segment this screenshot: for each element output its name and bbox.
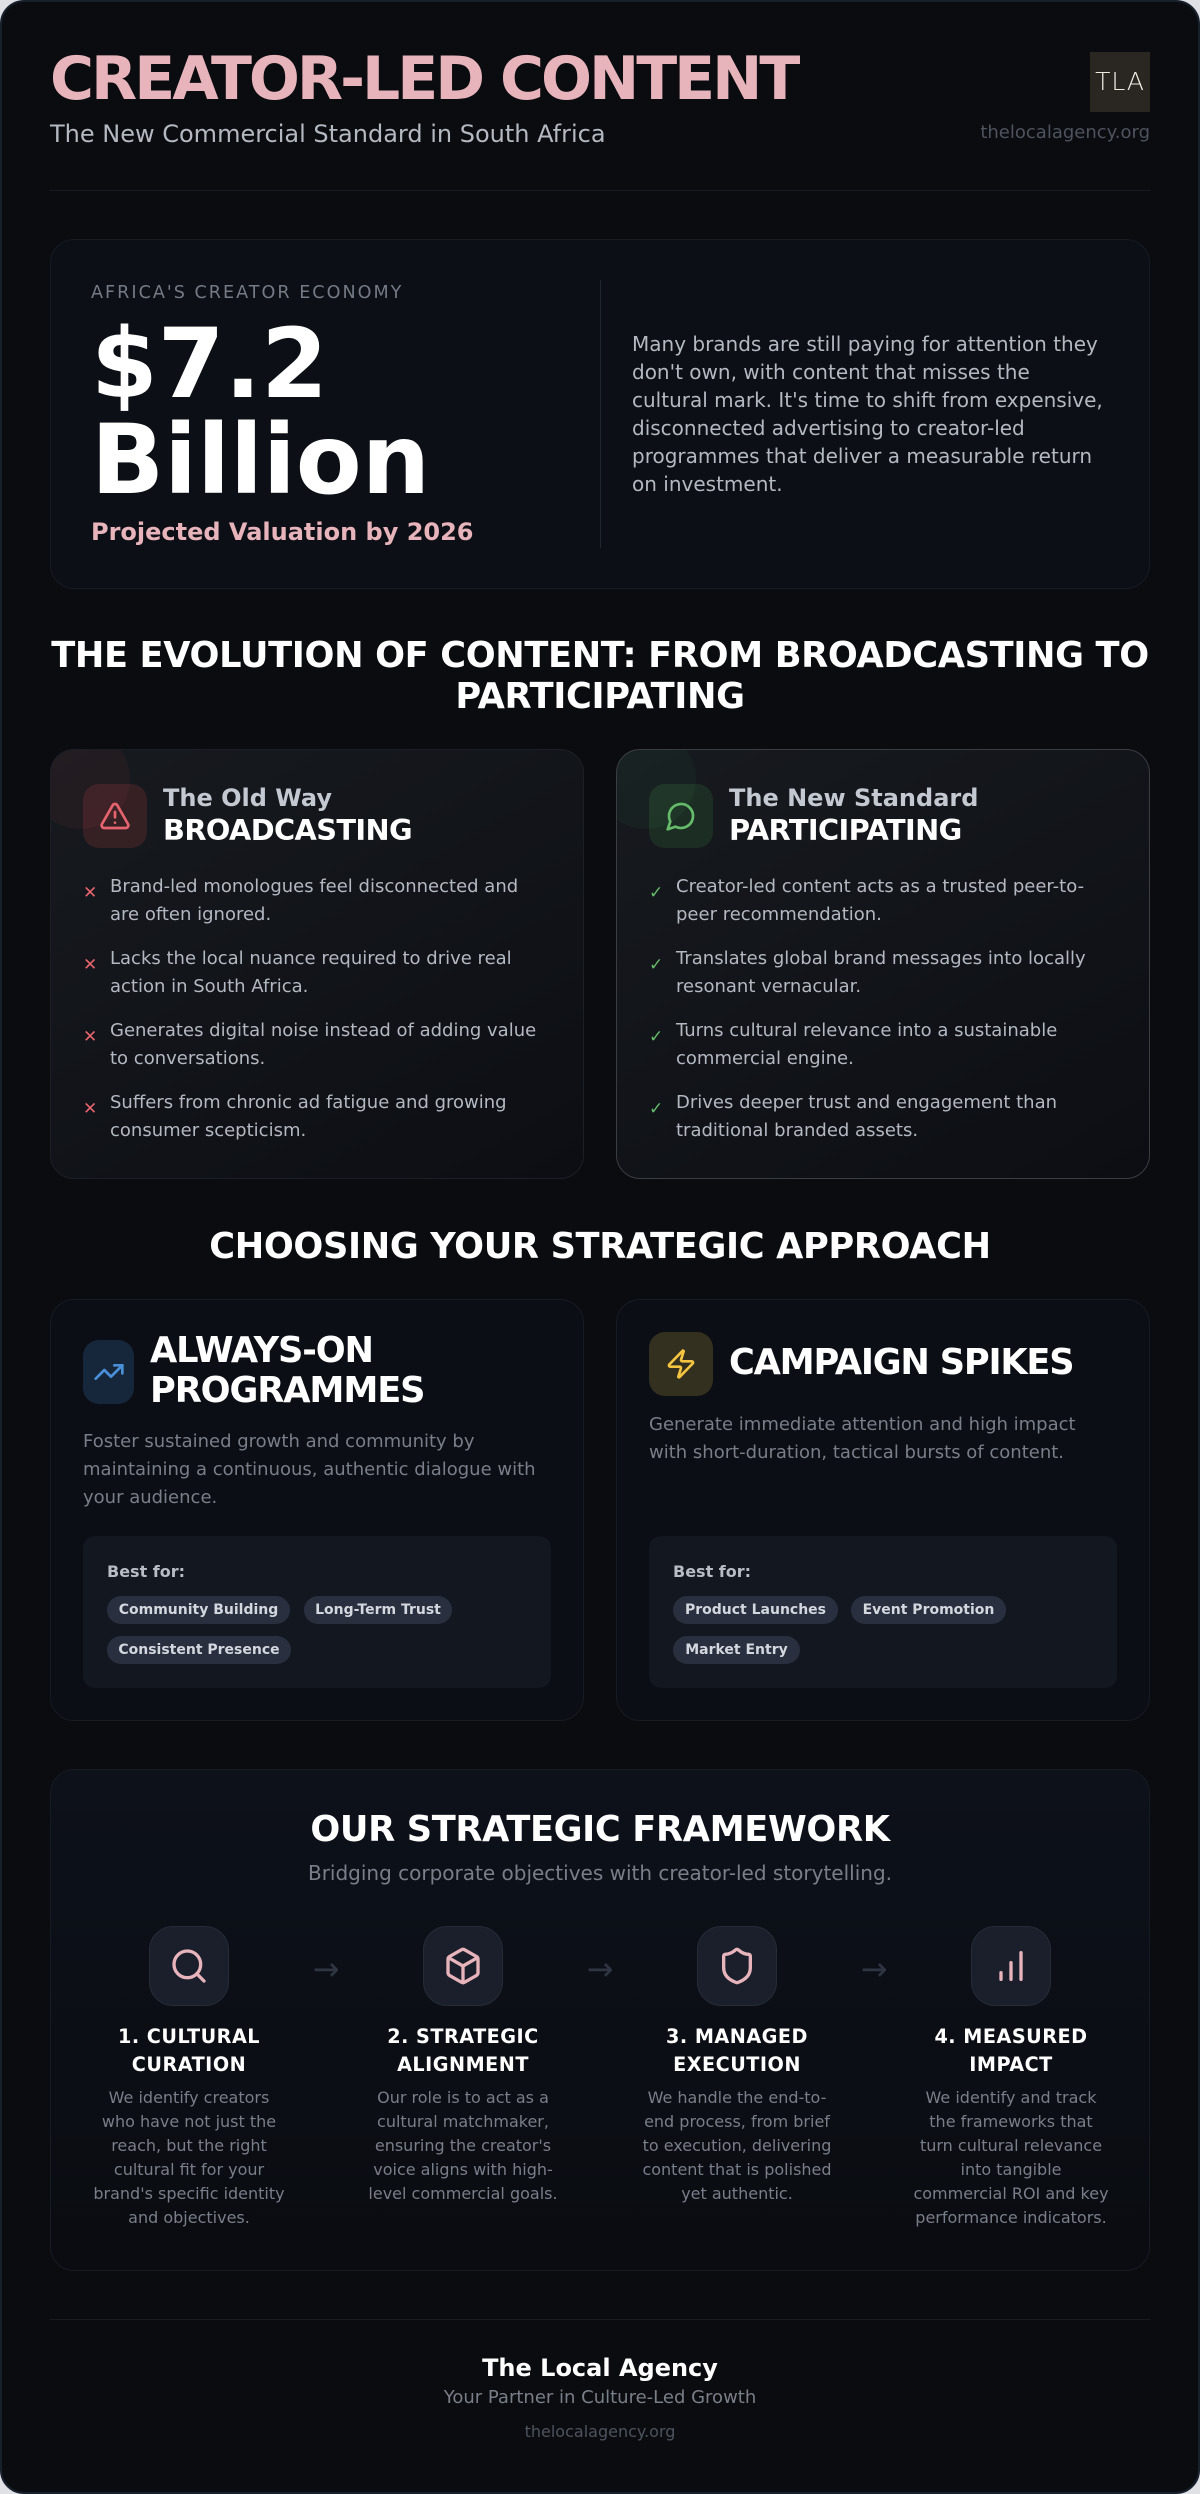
heading: evolution: PARTICIPATING [455, 676, 745, 717]
step text [913, 2088, 1109, 2227]
campaign title: CAMPAIGN SPIKES [729, 1342, 1073, 1383]
step text [642, 2088, 832, 2203]
bullet: Lacks the local nuance required to drive real [110, 948, 512, 969]
step text: ensuring the creator's [375, 2136, 551, 2155]
step text: cultural fit for your [114, 2160, 264, 2179]
framework title: OUR STRATEGIC FRAMEWORK [310, 1809, 890, 1850]
panel: new standard [616, 749, 1150, 1179]
bullet [83, 1092, 507, 1141]
bullet [83, 948, 512, 997]
icon: speech bubble [649, 784, 713, 848]
tag: Product Launches [685, 1602, 826, 1618]
step text: We identify creators [109, 2088, 269, 2107]
subtitle: The New Commercial Standard in South Africa [50, 120, 606, 148]
bullet [83, 1020, 536, 1069]
intro paragraph: on investment. [632, 472, 783, 496]
step title: 3. MANAGED [666, 2025, 808, 2048]
step text: commercial ROI and key [913, 2184, 1109, 2203]
tagline: Your Partner in Culture-Led Growth [444, 2387, 756, 2408]
step title: 1. CULTURAL [118, 2025, 260, 2048]
bullet: Creator-led content acts as a trusted peer-to- [676, 876, 1084, 897]
tag [107, 1636, 291, 1664]
big number: $7.2 [91, 308, 328, 420]
bullet [83, 876, 518, 925]
step title [387, 2025, 539, 2076]
valuation caption: Projected Valuation by 2026 [91, 518, 474, 546]
bullet: to conversations. [110, 1048, 265, 1069]
bullet: ✓ [649, 1027, 663, 1047]
step text: We handle the end-to- [648, 2088, 826, 2107]
bullet [649, 1092, 1057, 1141]
panel: campaign spikes [616, 1299, 1150, 1721]
bullet: consumer scepticism. [110, 1120, 306, 1141]
big number [91, 308, 430, 516]
agency name: The Local Agency [482, 2354, 718, 2382]
divider [600, 280, 601, 548]
eyebrow label: AFRICA'S CREATOR ECONOMY [91, 283, 403, 303]
always-on title: ALWAYS-ON [150, 1330, 373, 1371]
arrow: → [313, 1950, 339, 1988]
tag: Consistent Presence [118, 1642, 280, 1658]
always-on description [83, 1431, 536, 1508]
arrow: → [861, 1950, 887, 1988]
bullet [649, 876, 1084, 925]
bullet: are often ignored. [110, 904, 271, 925]
card kicker: The Old Way [163, 784, 332, 812]
step 2 [368, 1926, 558, 2203]
bullet: action in South Africa. [110, 976, 308, 997]
header [50, 40, 1150, 191]
footer [50, 2319, 1150, 2450]
bullet: commercial engine. [676, 1048, 854, 1069]
logo [1090, 52, 1150, 112]
step title [666, 2025, 808, 2076]
heading: evolution: THE EVOLUTION OF CONTENT: FROM BROADCASTING TO [51, 635, 1149, 676]
step text [368, 2088, 558, 2203]
bullet: Turns cultural relevance into a sustainable [676, 1020, 1057, 1041]
step title: IMPACT [969, 2053, 1053, 2076]
step text: yet authentic. [681, 2184, 793, 2203]
intro paragraph: cultural mark. It's time to shift from expensive, [632, 388, 1103, 412]
panel: old way [50, 749, 584, 1179]
bullet: ✓ [649, 955, 663, 975]
step text: Our role is to act as a [377, 2088, 549, 2107]
always-on title: PROGRAMMES [150, 1370, 424, 1411]
bullet: Translates global brand messages into locally [676, 948, 1086, 969]
decorative glow [30, 729, 130, 829]
intro paragraph: disconnected advertising to creator-led [632, 416, 1025, 440]
bullet: peer recommendation. [676, 904, 882, 925]
tag [673, 1596, 838, 1624]
tag [673, 1636, 800, 1664]
best for label: Best for: [673, 1562, 751, 1581]
bullet: ✓ [649, 1099, 663, 1119]
tag: Event Promotion [863, 1602, 994, 1618]
always-on description: Foster sustained growth and community by [83, 1431, 474, 1452]
step title [118, 2025, 260, 2076]
decorative glow [596, 729, 696, 829]
step title: EXECUTION [673, 2053, 801, 2076]
step text: content that is polished [642, 2160, 832, 2179]
campaign description: with short-duration, tactical bursts of content. [649, 1442, 1064, 1463]
icon: bar chart [971, 1926, 1051, 2006]
tag [851, 1596, 1006, 1624]
bullet: ✕ [83, 1099, 97, 1119]
campaign description [649, 1414, 1076, 1463]
card kicker: The New Standard [729, 784, 978, 812]
step 1 [93, 1926, 285, 2227]
step title [934, 2025, 1088, 2076]
icon: trending up [83, 1340, 134, 1404]
step text: the frameworks that [929, 2112, 1093, 2131]
step text: into tangible [960, 2160, 1062, 2179]
website link: thelocalagency.org [980, 122, 1150, 143]
bullet [649, 1020, 1057, 1069]
bullet: Brand-led monologues feel disconnected and [110, 876, 518, 897]
intro paragraph: programmes that deliver a measurable return [632, 444, 1092, 468]
panel: always-on [50, 1299, 584, 1721]
tag [304, 1596, 452, 1624]
bullet list [649, 876, 1086, 1141]
step text: cultural matchmaker, [377, 2112, 549, 2131]
step title: 2. STRATEGIC [387, 2025, 539, 2048]
bullet: resonant vernacular. [676, 976, 861, 997]
card title: PARTICIPATING [729, 813, 962, 847]
step text [93, 2088, 285, 2227]
step title: CURATION [132, 2053, 246, 2076]
title: CREATOR-LED CONTENT [50, 44, 797, 114]
framework subtitle: Bridging corporate objectives with creator-led storytelling. [308, 1861, 892, 1885]
arrow: → [587, 1950, 613, 1988]
step title: ALIGNMENT [397, 2053, 529, 2076]
tag: Market Entry [685, 1642, 788, 1658]
panel: framework [50, 1769, 1150, 2271]
card title: BROADCASTING [163, 813, 412, 847]
step text: and objectives. [128, 2208, 250, 2227]
always-on best for box [83, 1536, 551, 1688]
intro paragraph: Many brands are still paying for attention they [632, 332, 1098, 356]
campaign description: Generate immediate attention and high impact [649, 1414, 1076, 1435]
intro paragraph [632, 332, 1103, 496]
always-on title [150, 1330, 424, 1411]
icon: search [149, 1926, 229, 2006]
always-on description: maintaining a continuous, authentic dialogue with [83, 1459, 536, 1480]
bullet: Generates digital noise instead of adding value [110, 1020, 536, 1041]
step text: reach, but the right [111, 2136, 267, 2155]
step text: brand's specific identity [93, 2184, 285, 2203]
step 4 [913, 1926, 1109, 2227]
always-on description: your audience. [83, 1487, 217, 1508]
tag [107, 1596, 290, 1624]
bullet: ✓ [649, 883, 663, 903]
tag: Community Building [119, 1602, 278, 1618]
bullet: traditional branded assets. [676, 1120, 918, 1141]
bullet: Suffers from chronic ad fatigue and growing [110, 1092, 507, 1113]
step text: turn cultural relevance [920, 2136, 1102, 2155]
icon: lightning [649, 1332, 713, 1396]
panel: market hero [50, 239, 1150, 589]
intro paragraph: don't own, with content that misses the [632, 360, 1030, 384]
website: thelocalagency.org [525, 2422, 675, 2441]
heading: evolution [51, 635, 1149, 717]
heading: strategic approach: CHOOSING YOUR STRATEGIC APPROACH [209, 1226, 991, 1267]
bullet: ✕ [83, 955, 97, 975]
bullet: ✕ [83, 1027, 97, 1047]
step title: 4. MEASURED [934, 2025, 1088, 2048]
bullet [649, 948, 1086, 997]
icon: shield [697, 1926, 777, 2006]
best for label: Best for: [107, 1562, 185, 1581]
step 3 [642, 1926, 832, 2203]
bullet list [83, 876, 536, 1141]
bullet: Drives deeper trust and engagement than [676, 1092, 1057, 1113]
step text: voice aligns with high- [373, 2160, 553, 2179]
step text: who have not just the [102, 2112, 276, 2131]
step text: We identify and track [926, 2088, 1096, 2107]
icon: box [423, 1926, 503, 2006]
bullet: ✕ [83, 883, 97, 903]
icon: warning [83, 784, 147, 848]
big number: Billion [91, 404, 430, 516]
step text: end process, from brief [644, 2112, 830, 2131]
step text: performance indicators. [915, 2208, 1107, 2227]
campaign best for box [649, 1536, 1117, 1688]
logo: TLA [1095, 67, 1145, 96]
step text: to execution, delivering [643, 2136, 831, 2155]
tag: Long-Term Trust [315, 1602, 441, 1618]
step text: level commercial goals. [368, 2184, 558, 2203]
